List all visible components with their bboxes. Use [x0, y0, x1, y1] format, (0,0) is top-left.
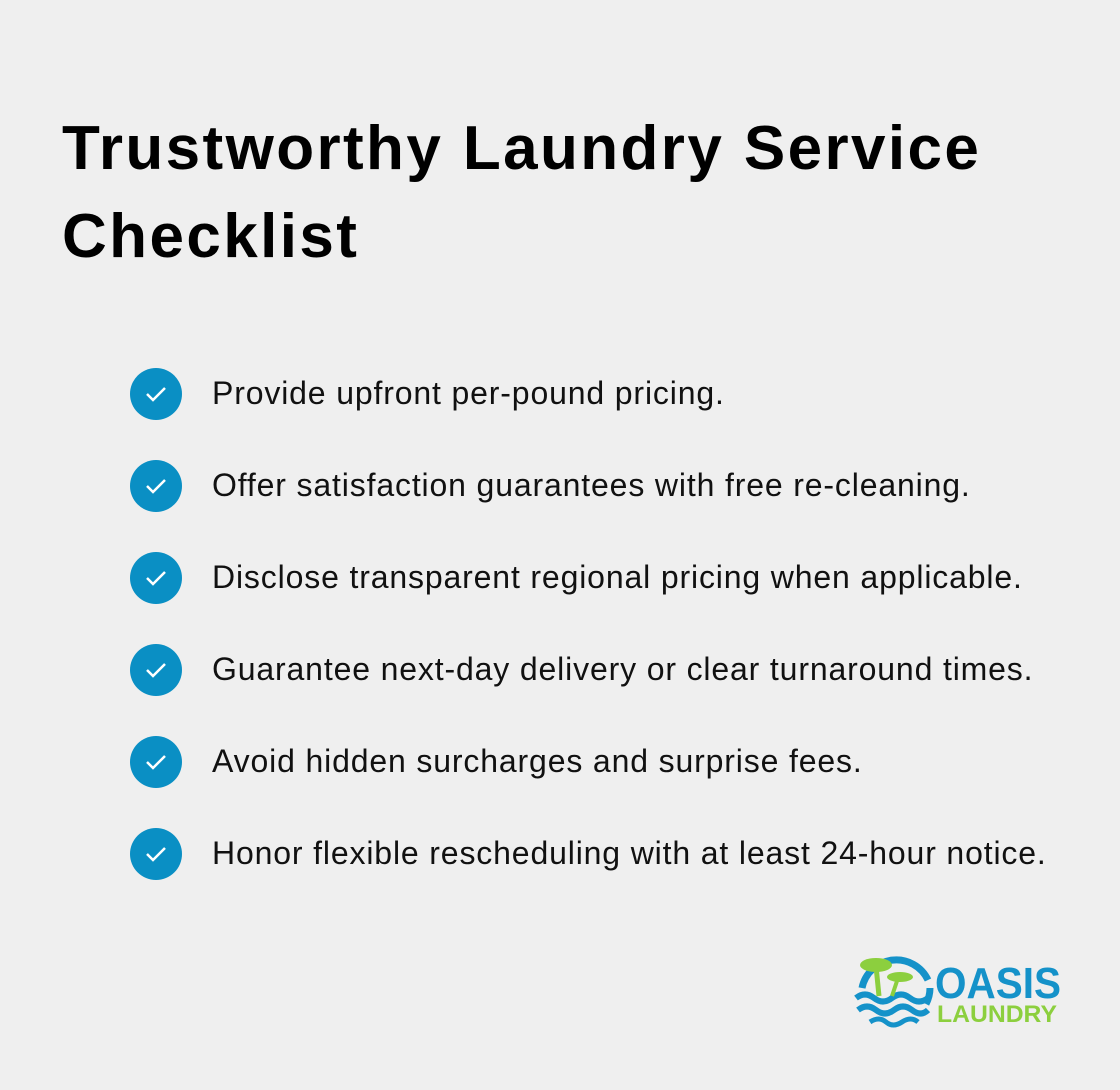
title — [62, 114, 981, 271]
item 1 — [130, 368, 725, 420]
item 1: Provide upfront per-pound pricing. — [212, 375, 725, 411]
item 2 — [130, 460, 971, 512]
logo — [854, 956, 1061, 1028]
item 5 — [130, 736, 863, 788]
item 4 — [130, 644, 1033, 696]
item 5: Avoid hidden surcharges and surprise fees. — [212, 743, 863, 779]
checklist — [130, 368, 1047, 880]
item 4: Guarantee next-day delivery or clear turnaround times. — [212, 651, 1033, 687]
title: Checklist — [62, 202, 359, 271]
item 3: Disclose transparent regional pricing when applicable. — [212, 559, 1023, 595]
item 6 — [130, 828, 1047, 880]
item 6: Honor flexible rescheduling with at least 24-hour notice. — [212, 835, 1047, 871]
item 2: Offer satisfaction guarantees with free re-cleaning. — [212, 467, 971, 503]
icon: palm circle — [856, 958, 930, 1025]
title: Trustworthy Laundry Service — [62, 114, 981, 183]
item 3 — [130, 552, 1023, 604]
logo: LAUNDRY — [937, 1001, 1057, 1028]
